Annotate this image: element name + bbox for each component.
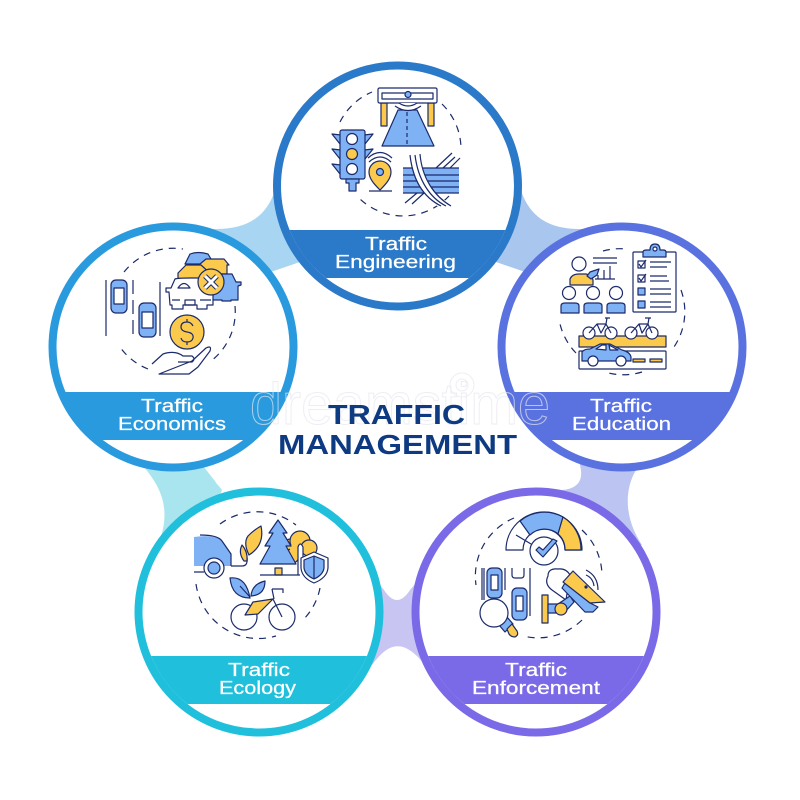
panel: traffic enforcement <box>416 492 656 732</box>
banner: traffic education <box>514 392 730 440</box>
connector: economics to ecology <box>136 458 222 545</box>
banner: traffic engineering <box>290 230 505 278</box>
title: MANAGEMENT <box>278 429 517 460</box>
title <box>278 399 517 460</box>
label: traffic engineering <box>335 234 456 272</box>
panel: traffic engineering <box>277 66 518 306</box>
central white area <box>214 265 581 600</box>
connector: economics to engineering <box>212 180 300 275</box>
label: traffic education <box>572 396 671 434</box>
panel: traffic economics <box>52 226 294 468</box>
label: traffic engineering: Traffic <box>365 234 427 254</box>
label: traffic education: Traffic <box>590 396 652 416</box>
connector: ecology to enforcement <box>372 575 425 665</box>
title: TRAFFIC <box>328 399 465 430</box>
panel: traffic ecology <box>138 492 380 732</box>
label: traffic education: Education <box>572 414 671 434</box>
connector: education to enforcement <box>560 462 642 545</box>
label: traffic ecology: Ecology <box>219 678 296 698</box>
label: traffic enforcement: Enforcement <box>472 678 600 698</box>
watermark: dreamstime <box>250 372 550 437</box>
label: traffic enforcement <box>472 660 600 698</box>
banner: traffic economics <box>65 392 281 440</box>
banner: traffic ecology <box>151 656 367 704</box>
connector: engineering to education <box>496 180 584 275</box>
icon: road infrastructure <box>332 88 461 216</box>
label: traffic ecology: Traffic <box>228 660 290 680</box>
icon: green transport <box>194 512 328 639</box>
label: traffic economics <box>118 396 226 434</box>
label: traffic ecology <box>219 660 296 698</box>
icon: congestion costs <box>106 248 241 374</box>
panel: traffic education <box>502 226 742 468</box>
icon: speed enforcement <box>475 512 605 638</box>
label: traffic engineering: Engineering <box>335 252 456 272</box>
label: traffic economics: Traffic <box>141 396 203 416</box>
label: traffic economics: Economics <box>118 414 226 434</box>
icon: classroom, checklist, road <box>559 244 685 375</box>
label: traffic enforcement: Traffic <box>505 660 567 680</box>
banner: traffic enforcement <box>428 656 644 704</box>
